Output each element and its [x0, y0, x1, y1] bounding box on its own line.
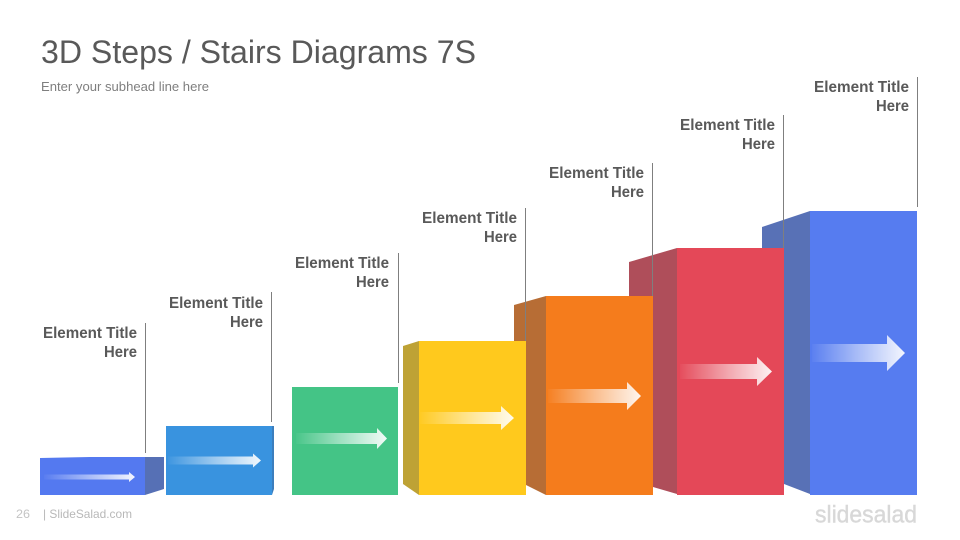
step 1: indigo [40, 457, 164, 495]
step 1 arrow [44, 472, 135, 482]
step 4 arrow [420, 406, 514, 430]
callout 3 [295, 253, 398, 383]
callout 4: Here [484, 229, 517, 246]
step 7: blue [762, 211, 917, 495]
step 5: orange [514, 296, 653, 495]
callout 1: Here [104, 344, 137, 361]
callout 2: Element Title [169, 295, 263, 312]
footer source: | SlideSalad.com [43, 507, 132, 521]
step 3 arrow [296, 428, 387, 449]
callout 7: Here [876, 98, 909, 115]
page number: 26 [16, 507, 30, 521]
callout 2 [169, 292, 272, 422]
callout 2: Here [230, 314, 263, 331]
step 3: green [292, 387, 398, 495]
callout 5: Element Title [549, 165, 644, 182]
callout 5 [549, 163, 652, 296]
step 6 arrow [680, 357, 772, 386]
step 6: red [629, 248, 784, 495]
callout 6: Element Title [680, 117, 775, 134]
step 5 arrow [548, 382, 641, 410]
callout 1 [43, 323, 146, 453]
logo: slidesalad: slidesalad [815, 502, 917, 528]
callout 7: Element Title [814, 79, 909, 96]
callout 4: Element Title [422, 210, 517, 227]
subhead: Enter your subhead line here [41, 80, 209, 94]
callout 5: Here [611, 184, 644, 201]
step 7 arrow [812, 335, 905, 371]
callout 3: Element Title [295, 255, 389, 272]
callout 6 [680, 115, 784, 248]
callout 1: Element Title [43, 325, 137, 342]
callout 3: Here [356, 274, 389, 291]
callout 7 [814, 77, 918, 207]
title: 3D Steps / Stairs Diagrams 7S [41, 34, 476, 70]
callout 4 [422, 208, 526, 341]
step 2: sky blue [166, 426, 274, 495]
step 4: yellow [403, 341, 526, 495]
step 2 arrow [168, 454, 261, 468]
callout 6: Here [742, 136, 775, 153]
